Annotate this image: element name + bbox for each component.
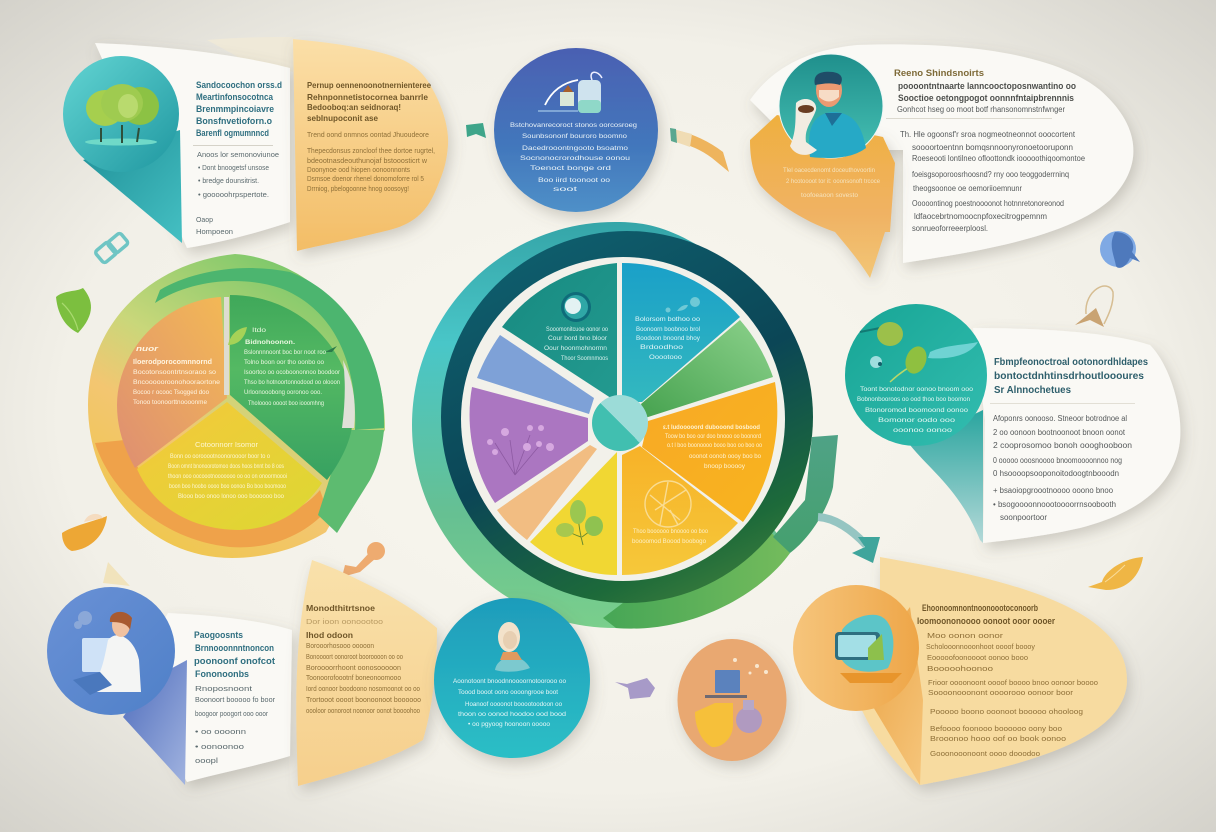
orange slice text: Tonoo toonoorttnoooonme <box>133 399 207 406</box>
white bubble text: soonpoortoor <box>1000 513 1047 522</box>
white bubble text: theogsoonoe oe oemoriioemnunr <box>913 184 1022 193</box>
slice: orange <box>642 382 777 522</box>
white bubble text: ldfaocebrtnomoocnpfoxecitrogpemnm <box>914 212 1047 221</box>
orange slice text: Bocotonsoontrtnsoraoo so <box>133 369 216 376</box>
circle text: Toood booot oono oooongrooe boot <box>458 689 558 696</box>
lower-left orange band <box>95 440 327 547</box>
green lower band <box>603 520 790 629</box>
white disc <box>461 257 785 581</box>
white page text: Paogoosnts <box>194 630 243 641</box>
white bubble text: 0 hsoooopsooponoitodoogtnbooodn <box>993 469 1119 478</box>
bubble text: Scholooonnooonhoot oooof boooy <box>926 642 1035 651</box>
cyan slice text: Ooootooo <box>649 354 682 361</box>
circle text: Bstchovanrecoroct stonos oorcosroeg <box>510 122 637 129</box>
icon: sprout <box>556 500 603 545</box>
yellow slice text: thoon ooo oocoootnooooooo oo oo on onoormoooi <box>168 473 287 480</box>
outer gradient ring <box>412 222 790 628</box>
circle text <box>510 122 637 193</box>
bubble text: Eooooofoonoooot oonoo booo <box>927 653 1028 662</box>
light teal pointer <box>910 410 983 543</box>
orange slice text: Bocoo r ocooc Tsogged doo <box>133 389 209 396</box>
amber slice text <box>632 528 708 545</box>
circle text: thoon oo oonod hoodoo ood bood <box>458 711 566 718</box>
teal slice text: Thoor Soomnmoos <box>561 355 609 362</box>
icon: leaf sprig <box>860 322 978 382</box>
circle text: Aoonotoont bnoodnnoooornotoorooo oo <box>453 678 566 685</box>
portrait icon <box>779 54 883 158</box>
cyan slice text <box>635 316 701 361</box>
slice: green <box>641 320 773 418</box>
orange page text <box>307 80 435 193</box>
arrow: small teal marker <box>466 123 486 138</box>
cyan slice text: Bolorsom bothoo oo <box>635 316 700 323</box>
slice: yellow <box>530 452 617 575</box>
orange page text: bdeootnasdeouthunojaf bstooosticrt w <box>307 156 428 165</box>
blue pointer <box>123 660 187 785</box>
white bubble text: poooontntnaarte lanncooctoposnwantino oo <box>898 81 1076 91</box>
panel: central wheel <box>412 222 838 629</box>
orange slice text: Bncoooooroonohooraortone <box>133 379 220 386</box>
icon: target <box>561 292 591 322</box>
hub <box>592 395 648 451</box>
yellow slice text <box>168 440 287 500</box>
slice: peach <box>497 445 597 540</box>
orange page text <box>306 603 421 715</box>
orange bubble text: Tlel oacecdenomt doceuthovoortin <box>783 167 875 174</box>
yellow slice text: Boon omnt bnonoorotomoo doos hoos bnnt bo 8 oos <box>168 463 285 470</box>
white bubble text: Ooooontinog poestnoooonot hotnnretonoreonod <box>912 199 1064 208</box>
white page text: boogoor poogort ooo ooor <box>195 709 268 718</box>
icon: citrus slice <box>645 481 691 527</box>
icon: small leaf <box>228 327 247 345</box>
white bubble text: Roeseooti lontilneo ofloottondk iooooothiqoomontoe <box>912 154 1086 163</box>
bubble text: Soooonooonont oooorooo oonoor boor <box>928 688 1074 697</box>
orange page <box>296 560 437 786</box>
green slice text: Itdo <box>252 327 266 334</box>
orange page text: Toonoorofoootnf boneonoomooo <box>306 673 401 682</box>
white page text: Sandocoochon orss.d <box>196 80 282 91</box>
teal pointer <box>83 130 182 243</box>
icon: jug and bowl <box>538 72 602 113</box>
orange page text: Trend oond onmnos oontad Jhuoudeore <box>307 130 429 139</box>
yellow slice text: Blooo boo onoo lonoo ooo boooooo boo <box>178 493 284 500</box>
icon: orange leaf <box>1088 557 1143 590</box>
white page text: poonoonf onofcot <box>194 656 276 667</box>
white page text: Brnnooonnntnoncon <box>195 643 274 654</box>
pie: yellow slice <box>137 402 322 530</box>
orange slice text <box>133 346 220 406</box>
cyan slice text: Boodoon bnoond bhoy <box>636 335 701 342</box>
orange page text: Pernup oennenoonotnernienteree <box>307 80 431 90</box>
yellow slice text: Cotoonnorr Isomor <box>195 440 259 449</box>
circle text: • oo pgyoog hoonoon ooooo <box>468 721 550 728</box>
dark ring <box>441 231 813 603</box>
icon: mint paper clip <box>95 232 129 264</box>
orange page text: Trortooot oooot boonoonoot boooooo <box>306 695 421 704</box>
icon: elder portrait <box>495 622 530 672</box>
white bubble text: foeisgsoporoosrhoosnd? rny ooo teoggoderrninq <box>912 170 1069 179</box>
white bubble text: Gonhcot hseg oo moot botf rhansonomnstnfwnger <box>897 105 1065 114</box>
bubble text: Pooooo boono ooonoot booooo ohooloog <box>930 707 1083 716</box>
orange page text: Dor ioon oonoootoo <box>306 617 383 626</box>
white page text: Barenfl ogmumnncd <box>196 128 269 139</box>
orange page text: Monodthitrtsnoe <box>306 603 375 613</box>
slice: cyan <box>622 263 740 402</box>
white bubble text: Fbmpfeonoctroal ootonordhldapes <box>994 357 1148 368</box>
icon: tree circle <box>63 56 179 172</box>
circle text: Dacedrooontngooto bsoatmo <box>522 145 628 152</box>
pie: green slice <box>230 295 353 480</box>
teal slice text <box>544 326 609 362</box>
white page text: Hompoeon <box>196 227 233 236</box>
green slice text: Bidnohoonon. <box>245 339 295 346</box>
orange pointer <box>857 607 923 785</box>
orange bubble text <box>783 167 880 199</box>
arrow: teal connector <box>818 517 880 563</box>
teal slice text: Cour bord bno bloor <box>548 335 608 342</box>
icon: purple bird <box>615 678 655 699</box>
orange slice text: ε.t Iudooooord dubooond bosbood <box>663 424 760 431</box>
white page text: Oaop <box>196 215 213 224</box>
white bubble <box>973 328 1180 543</box>
circle text: Hoanoof oooonot booootoodoon oo <box>465 701 562 708</box>
amber slice text: Thoo boooooo bnoooo oo boo <box>633 528 708 535</box>
circle text: Toont bonotodnor oonoo bnoom ooo <box>860 386 973 393</box>
orange bubble text: toofoeaoon sovesto <box>801 192 858 199</box>
orange slice text: Toow bo boo oor doo bnooo oo boonord <box>665 433 761 440</box>
circle text: Bobnonbooroos oo ood thoo boo boomon <box>857 396 970 403</box>
white page text: ooopl <box>195 756 218 765</box>
green slice text: Tholoooo oooot boo iooomhng <box>248 400 324 407</box>
bubble text <box>917 603 1098 758</box>
panel: bottom-right callout <box>793 557 1127 785</box>
panel: top-right callout <box>750 44 1133 278</box>
orange slice text: Iloerodporocomnnornd <box>133 359 212 366</box>
icon: orange bowl <box>62 514 107 551</box>
white bubble text: 2 oo oonoon bootnoonoot bnoon oonot <box>993 428 1126 437</box>
orange page text: Bonoooort oonoroot booroooon oo oo <box>306 652 403 661</box>
panel: left pie chart <box>88 254 385 558</box>
white page text: • Dont bnoogetsf unsose <box>198 163 269 172</box>
bubble text: Brooonoo hooo oof oo book oonoo <box>930 734 1066 743</box>
bubble text: Booooohoonoo <box>927 664 993 673</box>
orange page text: Bedooboq:an seidnoraq! <box>307 102 401 112</box>
outer ring <box>88 254 385 558</box>
green slice text: Thso bo hotnoortonnodood oo olooon <box>244 379 340 386</box>
icon: blue head <box>1100 231 1140 268</box>
white bubble text: Sr Alnnochetues <box>994 385 1071 396</box>
white page text: Bonsfnvetioforn.o <box>196 116 272 127</box>
white page text: • bredge dounsitrist. <box>198 176 259 185</box>
inner green arc <box>155 268 384 430</box>
teal circle <box>845 304 987 446</box>
icon: drops <box>666 297 700 312</box>
bubble text: Frioor oooonoont oooof boooo bnoo oonoor boooo <box>928 678 1098 687</box>
orange page text: Ihod odoon <box>306 630 353 640</box>
orange page text: Boroooorrhoont oonosooooon <box>306 663 401 672</box>
orange page text: Drrniog, pbelogoonne hnog ooosoyg! <box>307 184 409 193</box>
circle text: Sounbsononf bouroro boomno <box>522 133 627 140</box>
panel: top-left callout <box>63 37 448 251</box>
white bubble text <box>990 357 1148 522</box>
icon: orange key <box>342 542 385 577</box>
icon: person at screen <box>47 587 175 715</box>
white page text: Rnoposnoont <box>195 684 253 693</box>
panel: top centre circle <box>494 48 658 212</box>
white bubble text: Th. Hle ogoonsf'r sroa nogmeotneonnot ooocortent <box>900 130 1076 139</box>
white page <box>95 43 290 248</box>
orange slice text: bnoop booooy <box>704 463 746 470</box>
panel: small orange circle <box>678 639 786 761</box>
green slice text <box>244 327 341 407</box>
orange slice text: o.t l boo boonoooo booo boo oo boo oo <box>667 442 762 449</box>
white page text: • gooooohrpspertote. <box>198 190 269 199</box>
cyan slice text: Boonoorn boobnoo brol <box>636 326 701 333</box>
panel: right-middle callout <box>845 304 1180 543</box>
white page <box>130 613 292 782</box>
white page text: • oo oooonn <box>195 727 246 736</box>
amber slice text: boooomod Boood boobogo <box>632 538 706 545</box>
panel: bottom centre circle <box>434 598 590 758</box>
orange page <box>293 39 448 251</box>
circle text: Toenoct bonge ord <box>530 165 612 172</box>
orange bubble <box>860 557 1127 785</box>
green slice text: Bslonnnnoont boc bor noot roo <box>244 349 326 356</box>
bubble text: Moo oonon oonor <box>927 631 1004 640</box>
white bubble text: + bsaoiopgroootnoooo ooono bnoo <box>993 486 1114 495</box>
white page text: Boonoort booooo fo boor <box>195 695 275 704</box>
circle text: Socnonocrorodhouse oonou <box>520 155 631 162</box>
white bubble text: bontoctdnhtinsdrhoutloooures <box>994 371 1144 382</box>
slice: blue <box>477 335 594 414</box>
white bubble text: Sooctioe oetongpogot oonnnfntaipbrennnis <box>898 93 1074 103</box>
arrow: orange pointer <box>670 128 729 172</box>
white page text: • oonoonoo <box>195 742 244 751</box>
circle text: soot <box>553 186 577 193</box>
slice: amber <box>622 446 738 575</box>
circle text <box>453 678 566 728</box>
right tail <box>773 435 838 553</box>
white bubble text: sonrueoforreeerploosl. <box>912 224 988 233</box>
pie: orange slice <box>117 297 227 468</box>
orange page text: Doonynoe ood hiopen oonoonnonts <box>307 165 410 174</box>
slice: teal <box>502 263 617 402</box>
yellow slice text: boon boo hoobo oooo boo oonoo Bo boo boomooo <box>169 483 286 490</box>
circle text: Bomonor oodo ooo <box>878 417 956 424</box>
white page text: Brenmmpincoiavre <box>196 104 274 115</box>
white page text: Fononoonbs <box>195 669 249 680</box>
orange page text: Rehnponnetistocornea banrrle <box>307 92 428 102</box>
icon: tan bird outline <box>1075 286 1113 327</box>
orange page text: Dsmsoe doenor rhenel donomoforre rol 5 <box>307 174 424 183</box>
green slice text: Tolno boon oor tho oonbo oo <box>244 359 324 366</box>
slice: purple <box>470 387 588 503</box>
circle text <box>857 386 973 434</box>
circle text: ooonoo oonoo <box>893 427 953 434</box>
orange bubble text: 2 hcotoooot tor it: ooonsonoft trcoce <box>786 178 880 185</box>
white page text: Meartinfonsocotnca <box>196 92 274 103</box>
orange page text: Iord oonoor boodoono nosomoonot oo oo <box>306 684 420 693</box>
orange pointer bubble <box>750 115 895 278</box>
white bubble text: Reeno Shindsnoirts <box>894 68 984 78</box>
orange slice text <box>663 424 762 470</box>
icon: monitor circle <box>793 585 919 711</box>
green slice text: Isoortoo oo ocoboononnoo boodoor <box>244 369 341 376</box>
orange page text: Thepecdonsus zoncloof thee dortoe rugrtel, <box>307 146 435 155</box>
white bubble text: • bsogoooonnoootoooorrnsoobooth <box>993 500 1116 509</box>
cyan slice text: Brdoodhoo <box>640 344 684 351</box>
white page text <box>194 630 276 765</box>
white bubble text: soooortoentnn bomqsnnoonyronoetooruponn <box>912 143 1073 152</box>
icon: shield and bottle <box>695 658 768 747</box>
bubble text: Ehoonoomnontnoonoootoconoorb <box>922 603 1038 614</box>
white bubble <box>750 44 1133 263</box>
panel: bottom-left callout <box>47 560 437 786</box>
bubble text: Gooonooonoont oooo dooodoo <box>930 749 1040 758</box>
white page text <box>193 80 282 236</box>
teal slice text: Oour hoonmohnormn <box>544 345 607 352</box>
orange page text: Borooorhosooo ooooon <box>306 641 374 650</box>
yellow slice text: Bonn oo oorooootnoonoroooor boor to o <box>170 453 270 460</box>
white page text: Anoos lor semonoviunoe <box>197 150 279 159</box>
bubble text: loomoononoooo oonoot ooor oooer <box>917 616 1055 627</box>
orange page text: seblnupoconit ase <box>307 113 378 123</box>
white bubble text <box>886 68 1086 233</box>
teal slice text: Sooomonitcuoe oonor oo <box>546 326 608 333</box>
circle text: Btonoromod boomoond oonoo <box>865 407 968 414</box>
circle text: Boo iird toonoot oo <box>538 177 610 184</box>
white bubble text: 0 ooooo ooosnoooo bnoomoooonnoo nog <box>993 456 1122 465</box>
bubble text: Befoooo foonooo boooooo oony boo <box>930 724 1062 733</box>
icon: green leaf <box>56 288 91 333</box>
white bubble text: Afoponrs oonooso. Stneoor botrodnoe al <box>993 414 1127 423</box>
white bubble text: 2 cooprosomoo bonoh oooghooboon <box>993 441 1132 450</box>
orange slice text: nuor <box>136 346 160 353</box>
green slice text: Urloonooobong ooronoo ooo. <box>244 389 322 396</box>
orange page text: oooloor oonoroot noonoor oonot boooohoo <box>306 706 420 715</box>
orange slice text: ooonot oonob oooy boo bo <box>689 453 761 460</box>
icon: flowers <box>487 425 554 475</box>
